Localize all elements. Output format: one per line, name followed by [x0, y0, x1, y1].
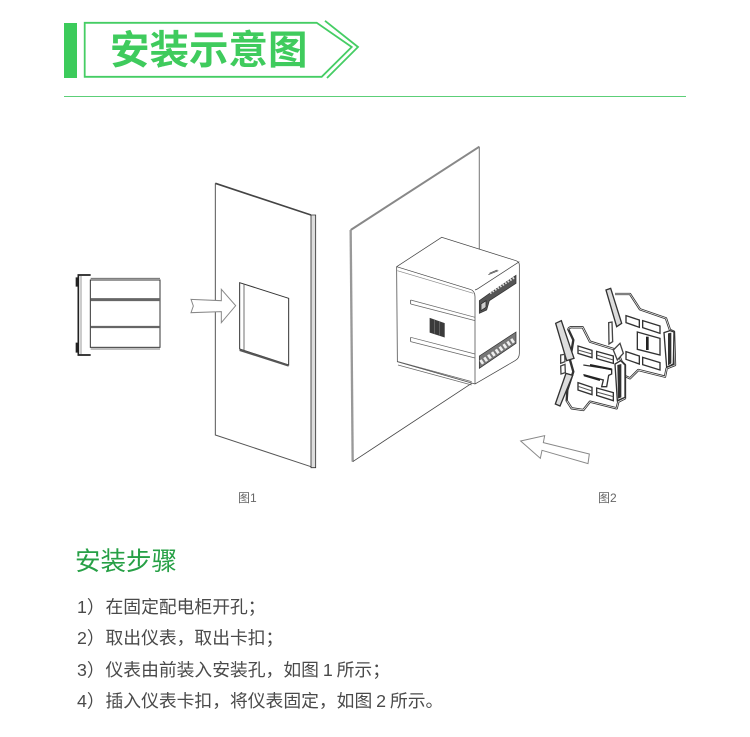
step 1: 1）: [77, 597, 105, 617]
caption: figure 2: 图2: [598, 491, 617, 505]
header divider: [64, 96, 686, 97]
header arrow frame: [85, 21, 358, 78]
step 4: 4）: [77, 691, 105, 711]
step 3: 仪表由前装入安装孔，如图 1 所示；: [106, 660, 390, 680]
title: 安装示意图: [110, 29, 308, 73]
header accent bar: [64, 23, 77, 78]
step 4: 插入仪表卡扣，将仪表固定，如图 2 所示。: [106, 691, 443, 711]
figure 1: insertion arrow: [191, 289, 236, 323]
step 1: 在固定配电柜开孔；: [106, 597, 266, 617]
figure 1: panel with cut-out: [215, 183, 316, 468]
step 2: 取出仪表，取出卡扣；: [106, 628, 283, 648]
caption: figure 1: 图1: [238, 491, 257, 505]
figure 1: meter side view: [77, 275, 160, 355]
figure 2: rear mounting clip: [606, 288, 675, 378]
step 3: 3）: [77, 660, 105, 680]
figure 2: insertion arrow: [521, 436, 589, 464]
steps heading: 安装步骤: [75, 548, 177, 576]
step 2: 2）: [77, 628, 105, 648]
figure 2: meter body: [397, 237, 519, 385]
figure 2: mounting panel: [351, 147, 479, 462]
figure 2: front mounting clip: [555, 321, 625, 410]
